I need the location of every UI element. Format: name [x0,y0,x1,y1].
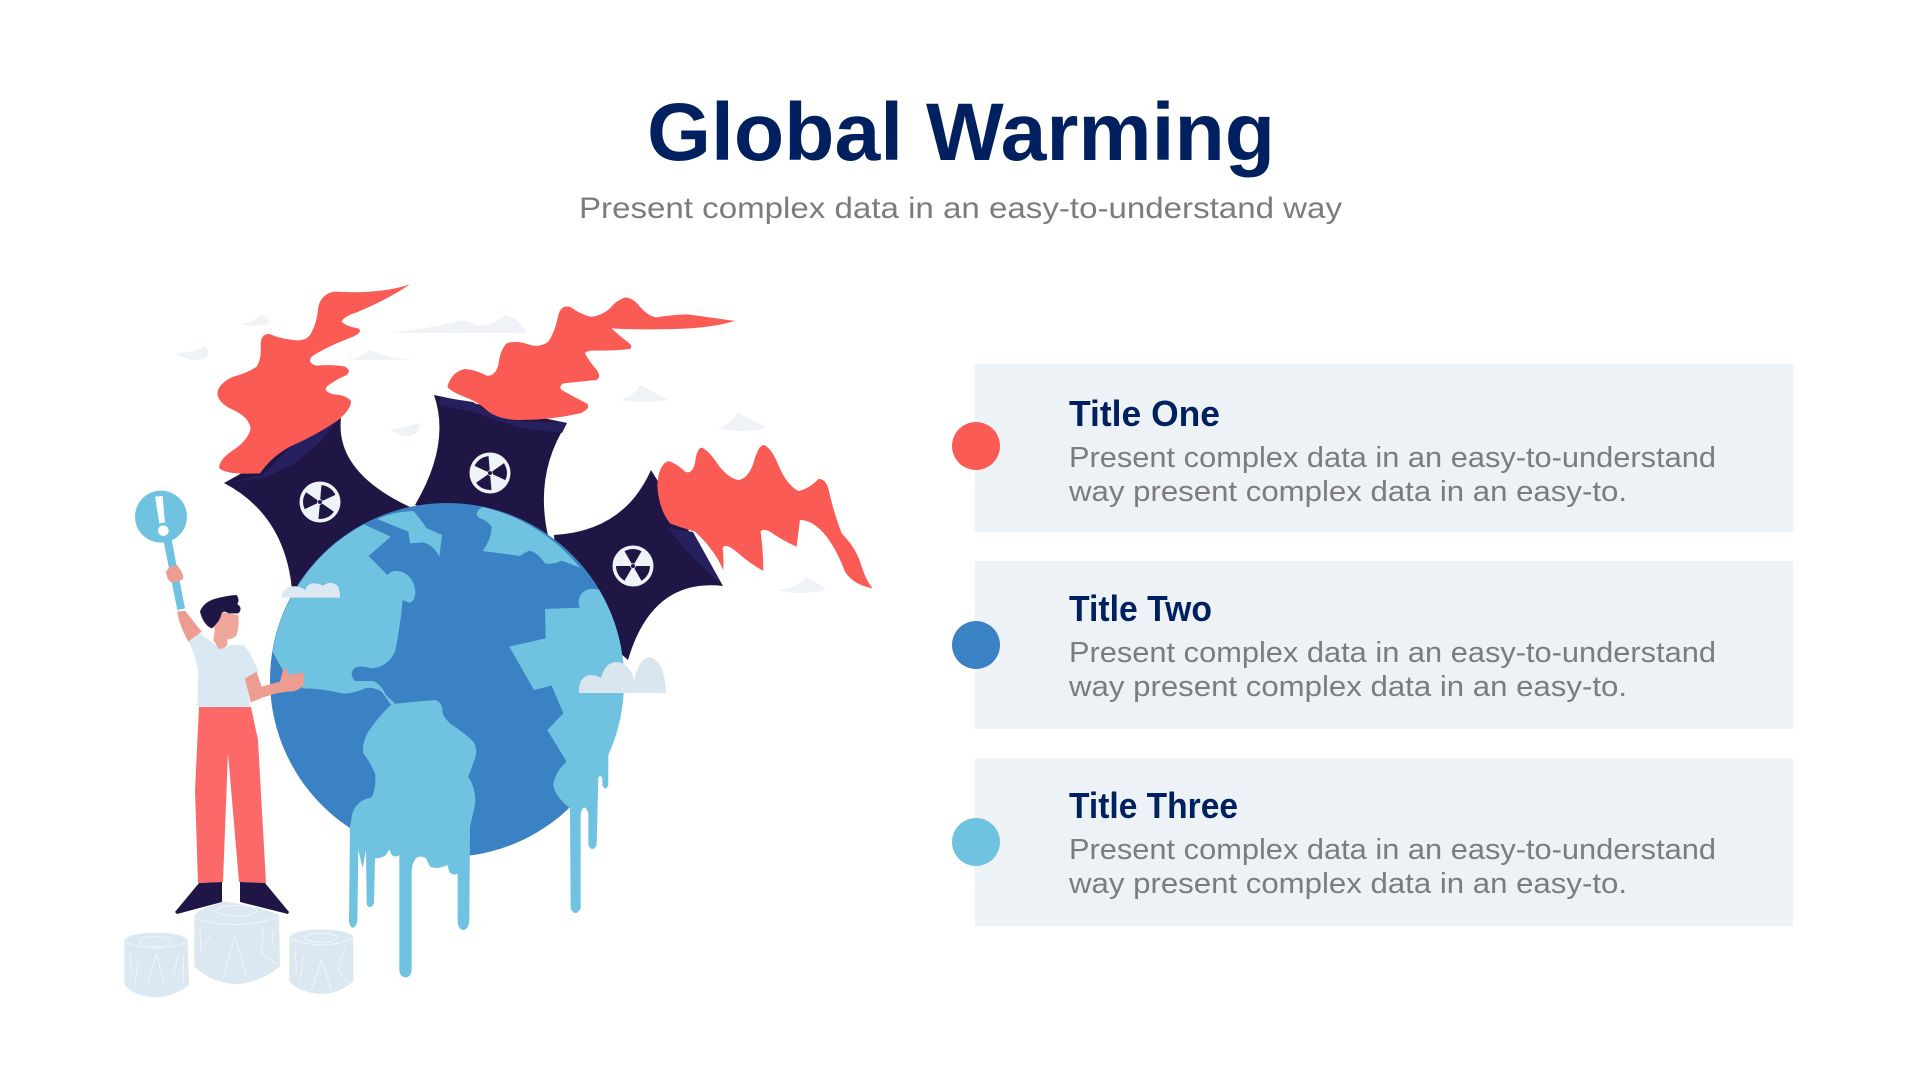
body text: Present complex data in an easy-to-understand [1069,442,1716,474]
exclamation mark [155,496,169,536]
body text: Present complex data in an easy-to-understand [1069,637,1716,669]
radiation symbol right [612,546,654,586]
card background [975,364,1793,532]
land: left continent [273,524,415,704]
body text: way present complex data in an easy-to. [1068,476,1627,508]
ice blocks [124,902,353,997]
subtitle: Present complex data in an easy-to-understand way [579,192,1342,225]
card 2 [952,561,1793,729]
right shoe [240,882,289,914]
bullet [952,818,1000,866]
radiation symbol left [295,477,345,526]
sign stick [163,540,185,610]
pants [195,707,266,883]
body text: Present complex data in an easy-to-understand [1069,834,1716,866]
land: top piece [377,511,442,557]
card 3 [952,758,1793,926]
tower right [554,470,723,660]
heading: Title Three [1069,785,1238,826]
shirt [188,633,258,707]
bullet [952,621,1000,669]
body text: way present complex data in an easy-to. [1068,868,1627,900]
land: upper right [477,507,580,568]
flame center [447,298,735,420]
tower rims [230,397,723,586]
warning sign [135,491,187,543]
globe land masses [273,507,624,977]
other arm and hand [245,668,304,703]
tower center [415,395,567,540]
flame left [217,284,410,474]
land: central continent with melt drips [349,700,476,977]
left shoe [175,882,222,914]
background clouds [177,315,826,593]
hair [200,595,241,628]
heading: Title One [1069,393,1220,434]
bullet [952,422,1000,470]
radiation symbol center [465,448,515,497]
body text: way present complex data in an easy-to. [1068,671,1627,703]
land: right with drips [509,589,624,913]
flame right [657,445,873,588]
illustration: melting globe with cooling towers [124,284,873,997]
cloud on globe left [282,583,340,598]
globe ocean [270,503,624,857]
cloud on globe right [579,657,666,693]
heading: Title Two [1069,588,1212,629]
hand holding sign [166,565,183,582]
card 1 [952,364,1793,532]
raised arm [177,611,202,642]
card background [975,758,1793,926]
title: Global Warming [647,87,1275,178]
card background [975,561,1793,729]
person [135,491,304,914]
face and neck [207,612,239,649]
tower left [224,418,410,640]
